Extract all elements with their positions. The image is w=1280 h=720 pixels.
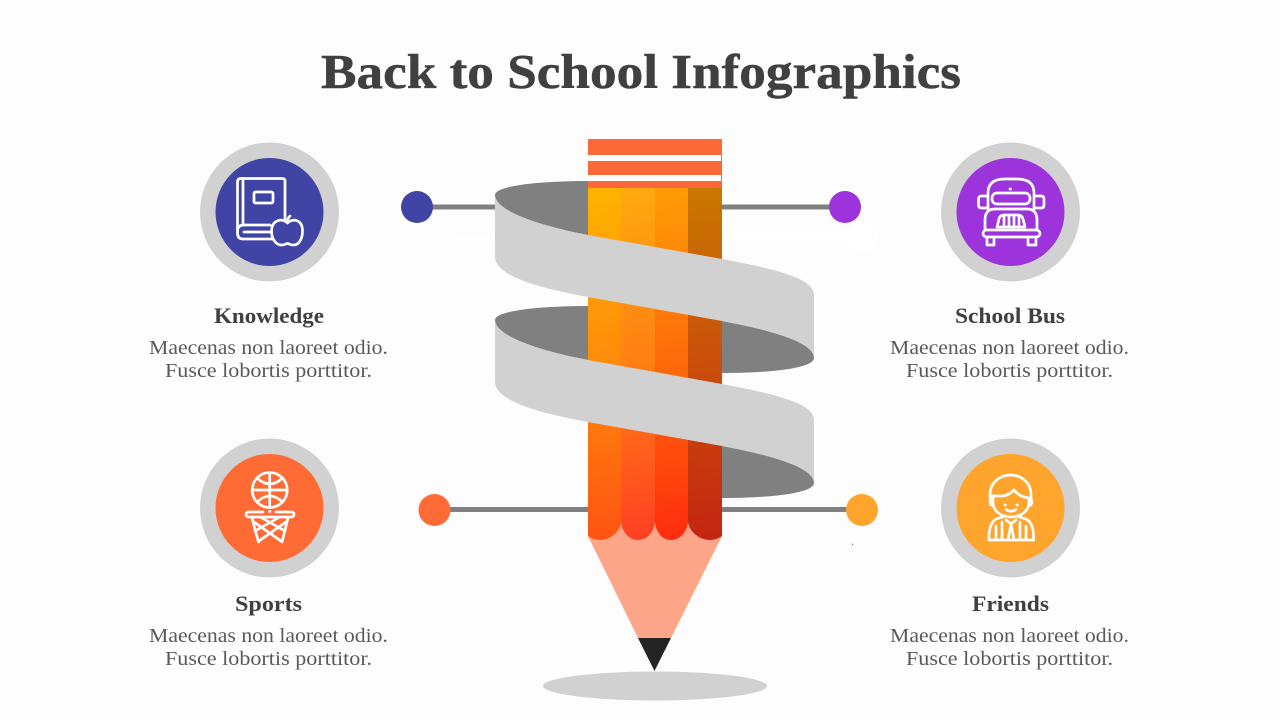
panel: knowledge — [149, 142, 388, 382]
ground shadow — [543, 672, 767, 700]
panel: sports — [149, 438, 388, 670]
text block: Maecenas non laoreet odio. — [149, 625, 388, 647]
text block: Fusce lobortis porttitor. — [165, 648, 372, 670]
panel: school bus — [890, 142, 1129, 382]
icon: student — [941, 438, 1080, 578]
heading: Knowledge — [214, 303, 324, 328]
icon: basketball hoop — [200, 438, 339, 578]
text block: Maecenas non laoreet odio. — [890, 625, 1129, 647]
pencil lead — [638, 638, 671, 671]
pencil cone — [588, 515, 722, 638]
connector: knowledge — [401, 191, 500, 223]
icon: school bus — [941, 142, 1080, 282]
connector: school bus — [715, 191, 861, 223]
panel: friends — [890, 438, 1129, 670]
faint background artifacts — [450, 222, 878, 545]
connector: sports — [418, 494, 595, 526]
text block — [149, 625, 388, 670]
heading: Sports — [235, 591, 302, 616]
icon: book and apple — [200, 142, 339, 282]
heading: Friends — [972, 591, 1049, 616]
text block: Maecenas non laoreet odio. — [890, 337, 1129, 359]
text block: Fusce lobortis porttitor. — [165, 360, 372, 382]
ribbon front: upper coil — [495, 195, 814, 358]
text block — [149, 337, 388, 382]
ribbon front: lower coil — [495, 320, 814, 483]
pencil — [588, 139, 722, 671]
pencil eraser band — [588, 139, 722, 188]
title: Back to School Infographics — [321, 44, 961, 99]
text block: Fusce lobortis porttitor. — [906, 360, 1113, 382]
connector: friends — [715, 494, 878, 526]
text block: Maecenas non laoreet odio. — [149, 337, 388, 359]
text block — [890, 625, 1129, 670]
text block: Fusce lobortis porttitor. — [906, 648, 1113, 670]
ribbon back: inner shading — [495, 181, 814, 498]
text block — [890, 337, 1129, 382]
heading: School Bus — [955, 303, 1065, 328]
pencil body columns — [588, 188, 722, 540]
